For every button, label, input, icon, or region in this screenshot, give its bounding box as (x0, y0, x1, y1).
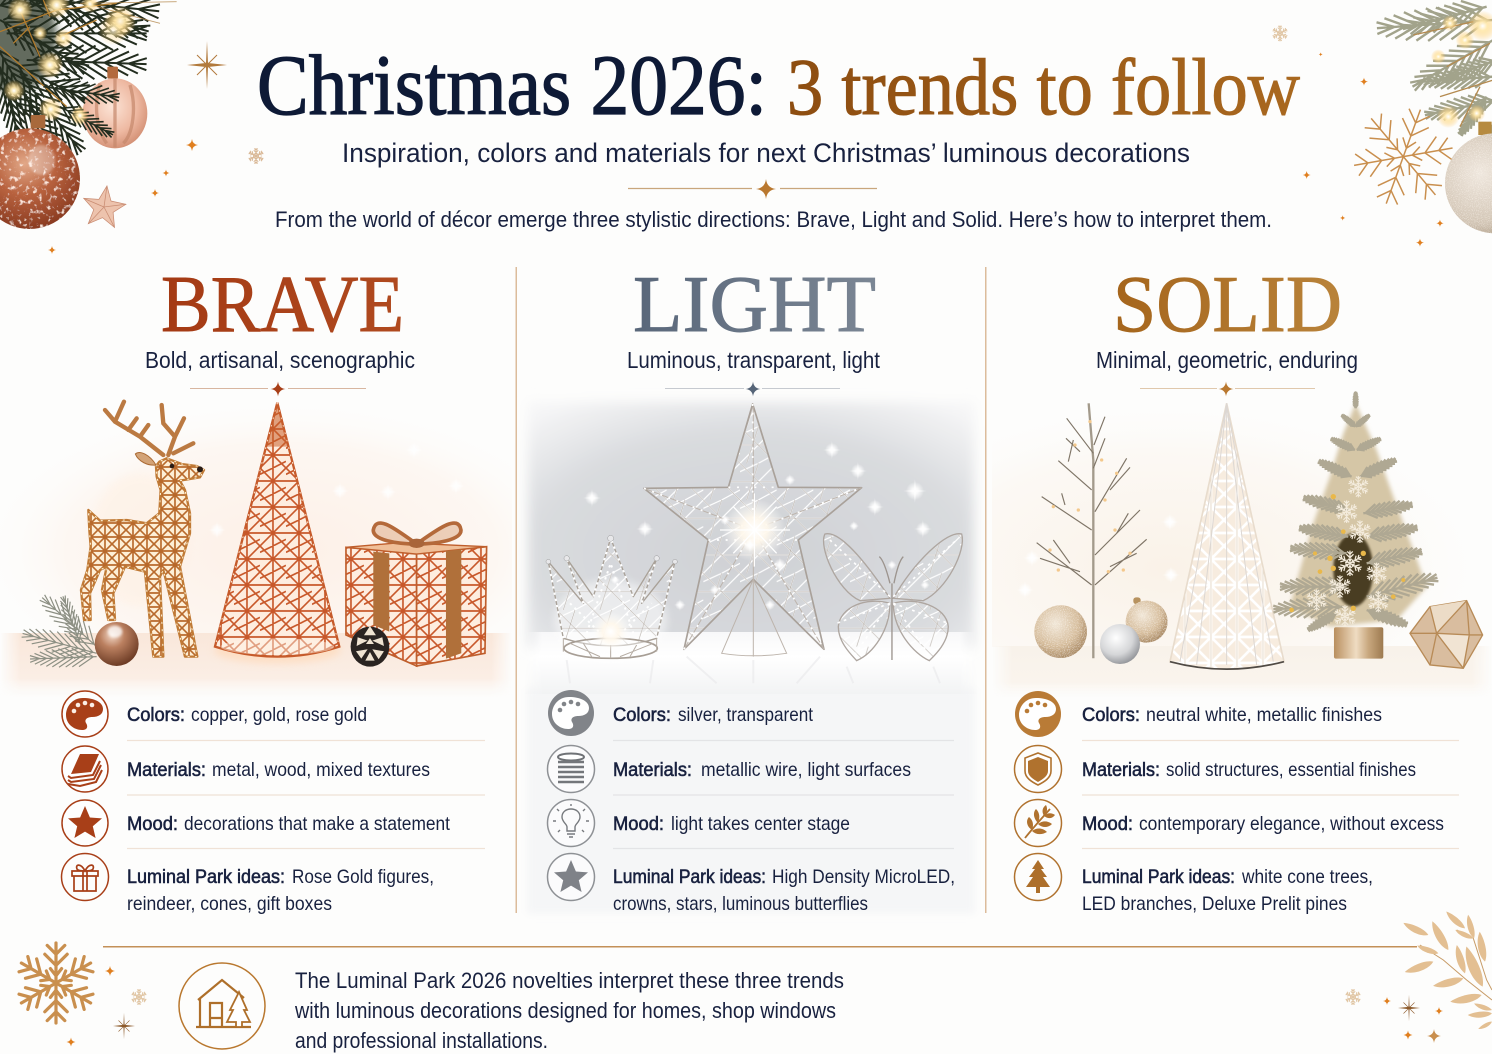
list: brave (62, 691, 485, 915)
title (257, 37, 1300, 133)
tagline: light: Luminous, transparent, light (627, 347, 881, 373)
row: colors: neutral white, metallic finishes (1146, 704, 1382, 726)
gold snowflake (1339, 92, 1468, 221)
sparkles: brave (208, 441, 465, 539)
row: luminal park ideas: LED branches, Deluxe Prelit pines (1082, 893, 1347, 915)
panel: light (524, 261, 978, 915)
decoration: top-left pine and baubles (0, 0, 177, 229)
icon: wire spool (548, 746, 594, 792)
icon: star (62, 800, 108, 846)
copper ball (95, 622, 139, 666)
light scene background (524, 400, 978, 694)
row: materials: Materials: (1082, 760, 1160, 781)
copper cone tree (214, 403, 341, 663)
row: mood: light takes center stage (671, 813, 850, 835)
row: mood: Mood: (613, 814, 664, 835)
row: luminal park ideas: white cone trees, (1241, 866, 1373, 888)
row: luminal park ideas: Luminal Park ideas: (1082, 867, 1235, 888)
header divider (628, 179, 877, 199)
pine cone (351, 626, 389, 667)
sparkles bottom-left (66, 966, 147, 1046)
champagne bauble (1445, 122, 1492, 233)
title: 3 trends to follow (787, 44, 1300, 132)
brave scene background (4, 439, 508, 688)
white cone tree (1170, 403, 1284, 669)
row: mood: Mood: (1082, 814, 1133, 835)
row: colors: Colors: (127, 705, 185, 726)
sparkle top-left (187, 41, 227, 89)
decoration: top-right pine and bauble (1272, 0, 1492, 247)
divider: solid (1140, 382, 1315, 396)
geometric bauble (1410, 601, 1483, 668)
reflections (567, 657, 940, 683)
row: colors (127, 704, 367, 726)
intro text: From the world of décor emerge three stylistic directions: Brave, Light and Solid. Here’s how to interpret them. (275, 207, 1272, 232)
row: materials (1082, 759, 1416, 781)
closing text: The Luminal Park 2026 novelties interpret these three trends (295, 968, 844, 993)
row: mood (613, 813, 850, 835)
panel: solid (992, 261, 1492, 915)
illustration: solid decorations (1016, 392, 1483, 669)
row: colors: Colors: (613, 705, 671, 726)
row: materials (613, 759, 911, 781)
rose gold bauble (83, 67, 147, 148)
row: colors: silver, transparent (678, 704, 814, 726)
icon: palette (1015, 691, 1061, 737)
row: luminal park ideas: crowns, stars, luminous butterflies (613, 893, 868, 915)
row: luminal park ideas: High Density MicroLED, (772, 866, 955, 888)
copper bauble (0, 115, 80, 229)
row: luminal park ideas (1082, 866, 1373, 915)
heading: light: LIGHT (633, 261, 876, 349)
row: materials (127, 759, 430, 781)
closing text: with luminous decorations designed for homes, shop windows (294, 998, 836, 1023)
list: solid (1014, 691, 1459, 915)
row: colors (613, 704, 814, 726)
gold and silver balls (1034, 597, 1168, 664)
icon: light bulb (548, 800, 594, 846)
illustration: light decorations (546, 404, 962, 683)
led branch tree (1037, 403, 1147, 658)
heading: solid: SOLID (1113, 261, 1342, 349)
row: luminal park ideas: Luminal Park ideas: (613, 867, 766, 888)
leaf branch bottom-right (1402, 910, 1492, 1031)
icon: silver star (548, 854, 594, 900)
list: light (548, 690, 955, 915)
wire star (644, 404, 862, 657)
sparkles: solid (1016, 513, 1180, 599)
wire butterfly (824, 534, 962, 661)
divider: light (665, 382, 840, 396)
illustration: brave decorations (20, 402, 487, 668)
icon: house and tree (179, 963, 265, 1049)
row: materials: Materials: (127, 760, 206, 781)
snowflake bottom-left (16, 943, 96, 1023)
row: mood: Mood: (127, 814, 178, 835)
copper star ornament (80, 183, 128, 229)
small snowflake left of subtitle (248, 148, 264, 164)
icon: material stack (62, 746, 108, 792)
subtitle: Inspiration, colors and materials for next Christmas’ luminous decorations (342, 138, 1190, 168)
row: materials: Materials: (613, 760, 692, 781)
tagline: solid: Minimal, geometric, enduring (1096, 347, 1358, 373)
sparkles bottom-right (1345, 989, 1443, 1043)
row: materials: solid structures, essential finishes (1166, 759, 1416, 781)
icon: shield (1014, 746, 1062, 792)
gift box (346, 523, 487, 666)
solid scene background (992, 459, 1483, 688)
divider: brave (190, 382, 366, 396)
icon: pine tree (1014, 854, 1062, 900)
row: luminal park ideas: Rose Gold figures, (292, 866, 434, 888)
wire crown (546, 535, 677, 660)
icon: gift (62, 854, 108, 900)
closing text (294, 968, 844, 1053)
fir sprig (20, 590, 104, 668)
row: luminal park ideas: Luminal Park ideas: (127, 867, 285, 888)
row: luminal park ideas: reindeer, cones, gift boxes (127, 893, 332, 915)
icon: palette (548, 690, 594, 736)
icon: leaf sprig (1014, 800, 1062, 846)
icon: palette (62, 691, 108, 737)
tagline: brave: Bold, artisanal, scenographic (145, 347, 415, 373)
sparkles: light (583, 441, 932, 611)
header (257, 37, 1300, 232)
panel: brave (0, 261, 512, 915)
row: mood: contemporary elegance, without excess (1139, 813, 1444, 835)
row: colors: copper, gold, rose gold (191, 704, 367, 726)
row: materials: metallic wire, light surfaces (701, 759, 911, 781)
row: materials: metal, wood, mixed textures (212, 759, 430, 781)
heading: brave: BRAVE (161, 261, 404, 349)
column dividers (516, 267, 986, 913)
footer rule (103, 946, 1417, 948)
row: mood: decorations that make a statement (184, 813, 451, 835)
sparkles and confetti left (48, 139, 198, 254)
title: Christmas 2026: (257, 37, 767, 133)
row: colors: Colors: (1082, 705, 1140, 726)
footer (16, 910, 1492, 1053)
closing text: and professional installations. (295, 1028, 548, 1053)
row: luminal park ideas (613, 866, 955, 915)
prelit pine tree (1273, 392, 1440, 659)
reindeer (81, 402, 204, 657)
row: luminal park ideas (127, 866, 434, 915)
